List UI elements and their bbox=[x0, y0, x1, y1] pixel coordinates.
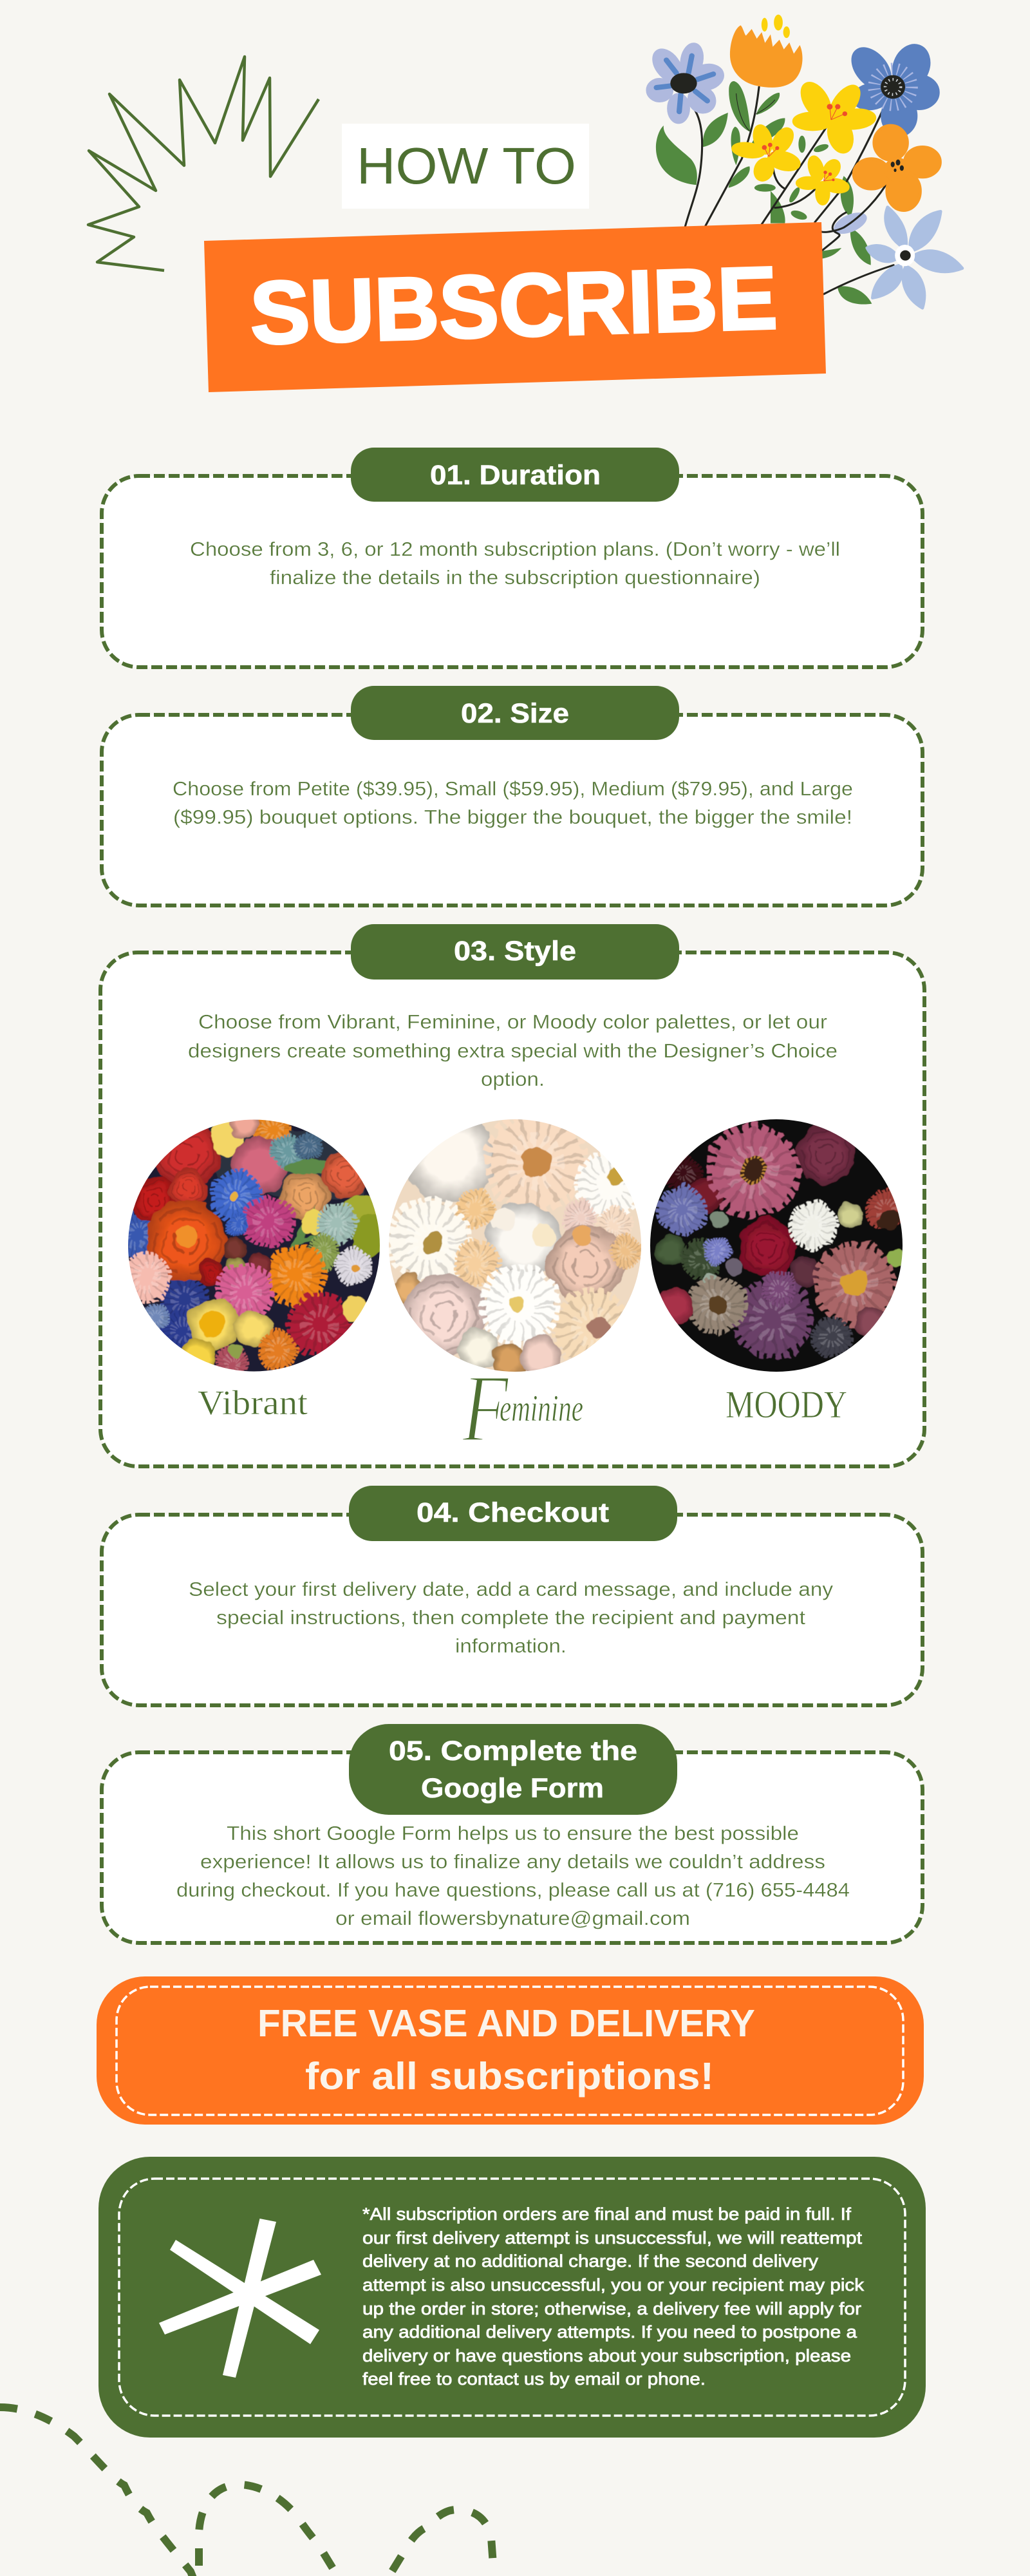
pill: checkout heading: 04. Checkout bbox=[417, 1497, 609, 1528]
text: google form description bbox=[176, 1822, 850, 1929]
text: style description: Choose from Vibrant, Feminine, or Moody color palettes, or let our bbox=[198, 1010, 827, 1033]
panel: 04 checkout bbox=[102, 1486, 922, 1705]
text: terms: attempt is also unsuccessful, you or your recipient may pick bbox=[362, 2275, 865, 2295]
text: google form description: This short Google Form helps us to ensure the best possible bbox=[227, 1822, 799, 1844]
text: duration description: Choose from 3, 6, or 12 month subscription plans. (Don’t worry - we’ll bbox=[190, 538, 840, 560]
text: terms: delivery or have questions about your subscription, please bbox=[362, 2346, 851, 2365]
text: style description: designers create something extra special with the Designer’s Choice bbox=[188, 1039, 838, 1062]
text: size description: Choose from Petite ($39.95), Small ($59.95), Medium ($79.95), and Large bbox=[173, 777, 853, 800]
panel: 05 google form bbox=[102, 1724, 922, 1943]
text: style description: option. bbox=[481, 1068, 545, 1090]
text: terms: our first delivery attempt is unsuccessful, we will reattempt bbox=[362, 2228, 863, 2248]
text: size description: ($99.95) bouquet options. The bigger the bouquet, the bigger the smile! bbox=[173, 806, 852, 828]
text: checkout description: information. bbox=[455, 1634, 566, 1657]
callout: free vase and delivery bbox=[97, 1976, 924, 2125]
callout: free vase and delivery: for all subscriptions! bbox=[305, 2055, 714, 2098]
text: terms: delivery at no additional charge. If the second delivery bbox=[362, 2251, 819, 2271]
pill: google form heading: Google Form bbox=[421, 1773, 604, 1804]
icon: zigzag burst bbox=[88, 57, 319, 270]
text: checkout description: special instructions, then complete the recipient and payment bbox=[216, 1606, 805, 1629]
pill: size heading bbox=[351, 686, 679, 740]
text: terms: any additional delivery attempts. If you need to postpone a bbox=[362, 2322, 857, 2342]
heading: how to bbox=[342, 124, 589, 209]
pill: checkout heading bbox=[349, 1486, 677, 1541]
label: vibrant: Vibrant bbox=[198, 1383, 308, 1422]
panel: 03 style bbox=[100, 924, 924, 1466]
pill: size heading: 02. Size bbox=[461, 698, 569, 729]
text: size description bbox=[173, 777, 853, 828]
panel: 02 size bbox=[102, 686, 922, 905]
pill: style heading: 03. Style bbox=[454, 936, 576, 967]
image: vibrant flowers bbox=[128, 1119, 380, 1372]
icon: asterisk bbox=[159, 2219, 321, 2378]
callout: free vase and delivery: FREE VASE AND DELIVERY bbox=[258, 2002, 755, 2045]
text: terms bbox=[362, 2204, 865, 2389]
pill: google form heading: 05. Complete the bbox=[389, 1736, 637, 1766]
panel: terms note bbox=[98, 2157, 926, 2438]
text: google form description: or email flowersbynature@gmail.com bbox=[335, 1907, 690, 1929]
text: style description bbox=[188, 1010, 838, 1090]
text: terms: *All subscription orders are final and must be paid in full. If bbox=[362, 2204, 852, 2224]
text: terms: up the order in store; otherwise, a delivery fee will apply for bbox=[362, 2299, 861, 2318]
text: checkout description: Select your first delivery date, add a card message, and include any bbox=[189, 1578, 834, 1600]
decorative dashed loop arrow bbox=[0, 2407, 494, 2576]
text: google form description: experience! It allows us to finalize any details we couldn’t address bbox=[200, 1850, 825, 1873]
text: terms: feel free to contact us by email or phone. bbox=[362, 2369, 706, 2389]
label: moody: MOODY bbox=[726, 1383, 847, 1426]
label: feminine bbox=[462, 1355, 583, 1462]
pill: style heading bbox=[351, 924, 679, 980]
text: checkout description bbox=[189, 1578, 834, 1657]
heading: subscribe banner: SUBSCRIBE bbox=[248, 249, 779, 363]
label: feminine: eminine bbox=[500, 1387, 583, 1429]
heading: subscribe banner bbox=[204, 222, 826, 392]
panel: 01 duration bbox=[102, 448, 922, 667]
heading: how to: HOW TO bbox=[357, 137, 576, 194]
text: duration description bbox=[190, 538, 840, 589]
text: duration description: finalize the details in the subscription questionnaire) bbox=[270, 566, 760, 589]
pill: duration heading: 01. Duration bbox=[430, 460, 601, 491]
label: feminine: F bbox=[462, 1355, 509, 1462]
image: moody flowers bbox=[650, 1119, 903, 1372]
icon: flower bouquet bbox=[648, 15, 962, 308]
text: google form description: during checkout. If you have questions, please call us at (716) 655-4484 bbox=[176, 1879, 850, 1901]
pill: google form heading bbox=[349, 1724, 677, 1815]
image: feminine flowers bbox=[389, 1119, 641, 1372]
pill: duration heading bbox=[351, 448, 679, 502]
